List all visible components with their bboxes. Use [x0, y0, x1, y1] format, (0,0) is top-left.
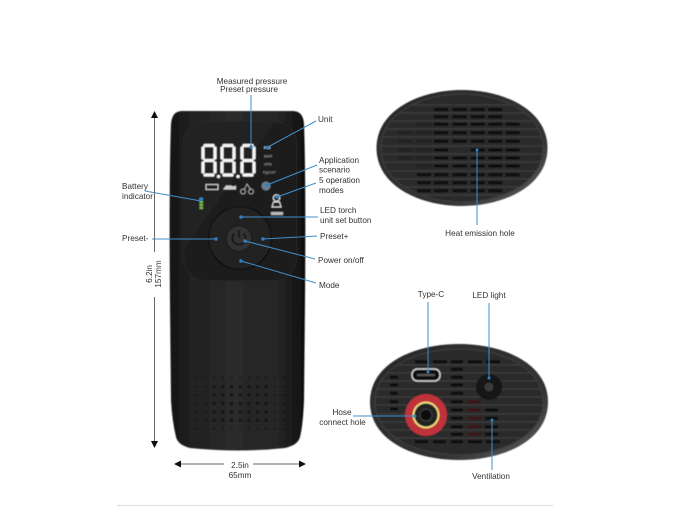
power button: [226, 226, 252, 252]
callout labels: Preset pressure: [220, 85, 278, 94]
height dimension arrow: [151, 111, 158, 448]
panel: connector end view: [370, 344, 550, 460]
callout labels: LED torch: [320, 206, 357, 215]
outer shell: [370, 344, 548, 460]
callout labels: LED light: [472, 291, 506, 300]
callout labels: Heat emission hole: [445, 229, 515, 238]
control panel: [183, 121, 297, 281]
callout labels: scenario: [319, 166, 350, 174]
seven-segment display showing 8.8.8: [203, 146, 254, 176]
height label: 6.2in: [145, 265, 154, 283]
outer shell: [376, 90, 548, 206]
panel: heat emission end view: [375, 90, 550, 206]
width dimension arrow: [174, 460, 306, 468]
unit labels: PSI: [264, 145, 270, 150]
inner grille: [375, 349, 543, 455]
vent slots: [390, 362, 500, 442]
width label: [229, 461, 252, 480]
callout labels: Mode: [319, 281, 340, 290]
unit labels: BAR: [264, 154, 272, 158]
callout labels: 5 operation: [319, 176, 360, 185]
callout labels: Power on/off: [318, 256, 365, 265]
callout labels: unit set button: [320, 216, 372, 225]
callout lines: [145, 95, 492, 470]
callout labels: Type-C: [418, 290, 444, 299]
LED light lens: [476, 374, 502, 400]
height label: 157mm: [154, 260, 163, 288]
unit labels: Kg/cm²: [263, 170, 276, 174]
callout labels: Ventilation: [472, 472, 510, 481]
callout labels: [122, 77, 515, 481]
application scenario icons: car, motorcycle, bicycle, ball: [206, 182, 270, 194]
operation mode icon: [271, 195, 283, 215]
callout labels: Hose: [332, 408, 352, 417]
device body: [170, 111, 305, 450]
inner grille: [381, 94, 543, 202]
faint left vent slots: [398, 124, 431, 166]
USB Type-C port: [412, 369, 440, 381]
callout labels: Battery: [122, 182, 149, 191]
width label: 2.5in: [231, 461, 249, 470]
reddish vent slots: [468, 402, 481, 434]
device: front view of tyre inflator: [170, 111, 305, 450]
hose connector: [405, 394, 447, 436]
battery level indicator: [200, 198, 203, 209]
callout labels: Measured pressure: [217, 77, 288, 86]
callout labels: Preset-: [122, 234, 149, 243]
height label: [145, 260, 163, 288]
unit labels: KPA: [264, 162, 272, 166]
callout end dots: [199, 145, 493, 421]
vent slots: [417, 110, 520, 191]
vent ridges: [370, 365, 550, 438]
speaker dot grid: [197, 378, 285, 429]
vent ridges: [375, 105, 550, 195]
callout labels: indicator: [122, 192, 153, 201]
callout labels: Application: [319, 156, 360, 165]
width label: 65mm: [229, 471, 252, 480]
callout labels: connect hole: [319, 418, 366, 427]
unit labels: [263, 145, 276, 174]
callout labels: Unit: [318, 115, 333, 124]
control dial: [208, 206, 272, 270]
callout labels: Preset+: [320, 232, 349, 241]
callout labels: modes: [319, 186, 344, 195]
